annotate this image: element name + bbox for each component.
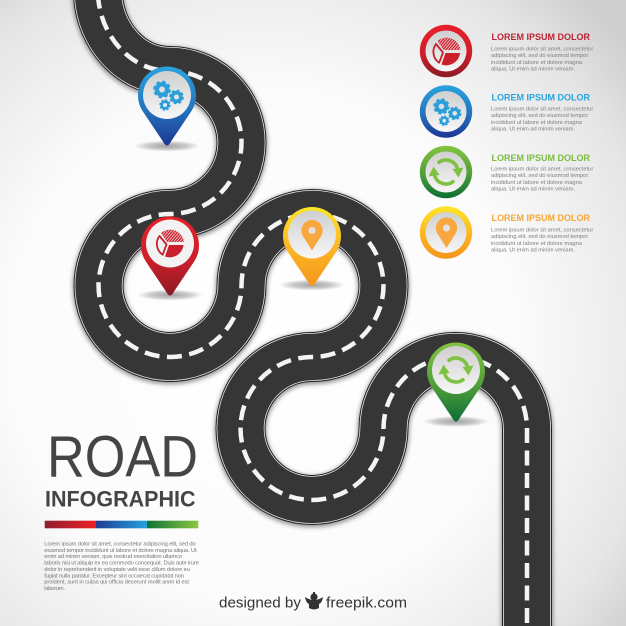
- heading: orange: LOREM IPSUM DOLOR: [492, 213, 590, 224]
- text block: yellow: aliqua. Ut enim ad minim veniam.: [491, 248, 575, 254]
- text block: yellow: Lorem ipsum dolor sit amet, consectetur: [491, 227, 593, 233]
- text block: yellow: incididunt ut labore et dolore magna: [491, 241, 583, 247]
- legend item: yellow: [420, 206, 593, 259]
- intro paragraph: laboris nisi ut aliquip ex ea commodo consequat. Duis aute irure: [44, 560, 199, 566]
- footer credit: [219, 592, 407, 612]
- intro paragraph: eiusmod tempor incididunt ut labore et dolore magna aliqua. Ut: [44, 548, 197, 554]
- intro paragraph: laborum.: [44, 586, 65, 592]
- text block: red: [491, 46, 593, 72]
- credit text: designed by: designed by: [219, 595, 301, 612]
- legend item: blue: [420, 85, 593, 138]
- intro paragraph: dolor in reprehenderit in voluptate velit esse cillum dolore eu: [44, 567, 190, 573]
- text block: green: adipiscing elit, sed do eiusmod tempor: [491, 173, 588, 179]
- heading: green: LOREM IPSUM DOLOR: [492, 153, 590, 164]
- title: ROAD: ROAD: [47, 425, 198, 490]
- intro paragraph: enim ad minim veniam, quis nostrud exercitation ullamco: [44, 554, 182, 560]
- intro paragraph: Lorem ipsum dolor sit amet, consectetur adipiscing elit, sed do: [44, 541, 196, 547]
- pin: red pie chart: [137, 216, 203, 300]
- intro paragraph: fugiat nulla pariatur. Excepteur sint occaecat cupidatat non: [44, 573, 184, 579]
- colour gradient bar: [45, 521, 198, 528]
- text block: blue: [491, 106, 593, 132]
- text block: green: Lorem ipsum dolor sit amet, consectetur: [491, 166, 593, 172]
- intro paragraph: proident, sunt in culpa qui officia deserunt mollit anim id est: [44, 580, 189, 586]
- winding road: [98, 0, 527, 626]
- pin: blue gears: [134, 66, 200, 152]
- text block: red: aliqua. Ut enim ad minim veniam.: [491, 66, 575, 72]
- pin: yellow location marker: [279, 207, 345, 290]
- pin: green cycle arrows: [423, 342, 489, 427]
- text block: green: aliqua. Ut enim ad minim veniam.: [491, 186, 575, 192]
- credit text: freepik.com: freepik.com: [326, 595, 407, 612]
- road centre dashes: [98, 0, 527, 626]
- heading: blue: LOREM IPSUM DOLOR: [492, 92, 590, 103]
- legend item: red: [420, 25, 593, 77]
- legend item: green: [420, 146, 593, 198]
- text block: blue: aliqua. Ut enim ad minim veniam.: [491, 126, 575, 132]
- text block: red: incididunt ut labore et dolore magna: [491, 60, 583, 66]
- text block: green: incididunt ut labore et dolore magna: [491, 180, 583, 186]
- text block: yellow: adipiscing elit, sed do eiusmod tempor: [491, 234, 588, 240]
- heading: red: LOREM IPSUM DOLOR: [492, 32, 590, 43]
- icon: pie chart badge: [420, 25, 472, 77]
- icon: cycle arrows badge: [420, 146, 472, 198]
- text block: red: Lorem ipsum dolor sit amet, consectetur: [491, 46, 593, 52]
- icon: location marker badge: [420, 206, 472, 259]
- intro paragraph: [44, 541, 199, 592]
- icon: gears badge: [420, 85, 472, 138]
- icon: freepik logo: [305, 592, 323, 610]
- text block: green: [491, 166, 593, 192]
- subtitle: INFOGRAPHIC: INFOGRAPHIC: [45, 487, 196, 512]
- text block: blue: adipiscing elit, sed do eiusmod tempor: [491, 113, 588, 119]
- text block: yellow: [491, 227, 593, 254]
- text block: blue: incididunt ut labore et dolore magna: [491, 120, 583, 126]
- text block: blue: Lorem ipsum dolor sit amet, consectetur: [491, 106, 593, 112]
- text block: red: adipiscing elit, sed do eiusmod tempor: [491, 53, 588, 59]
